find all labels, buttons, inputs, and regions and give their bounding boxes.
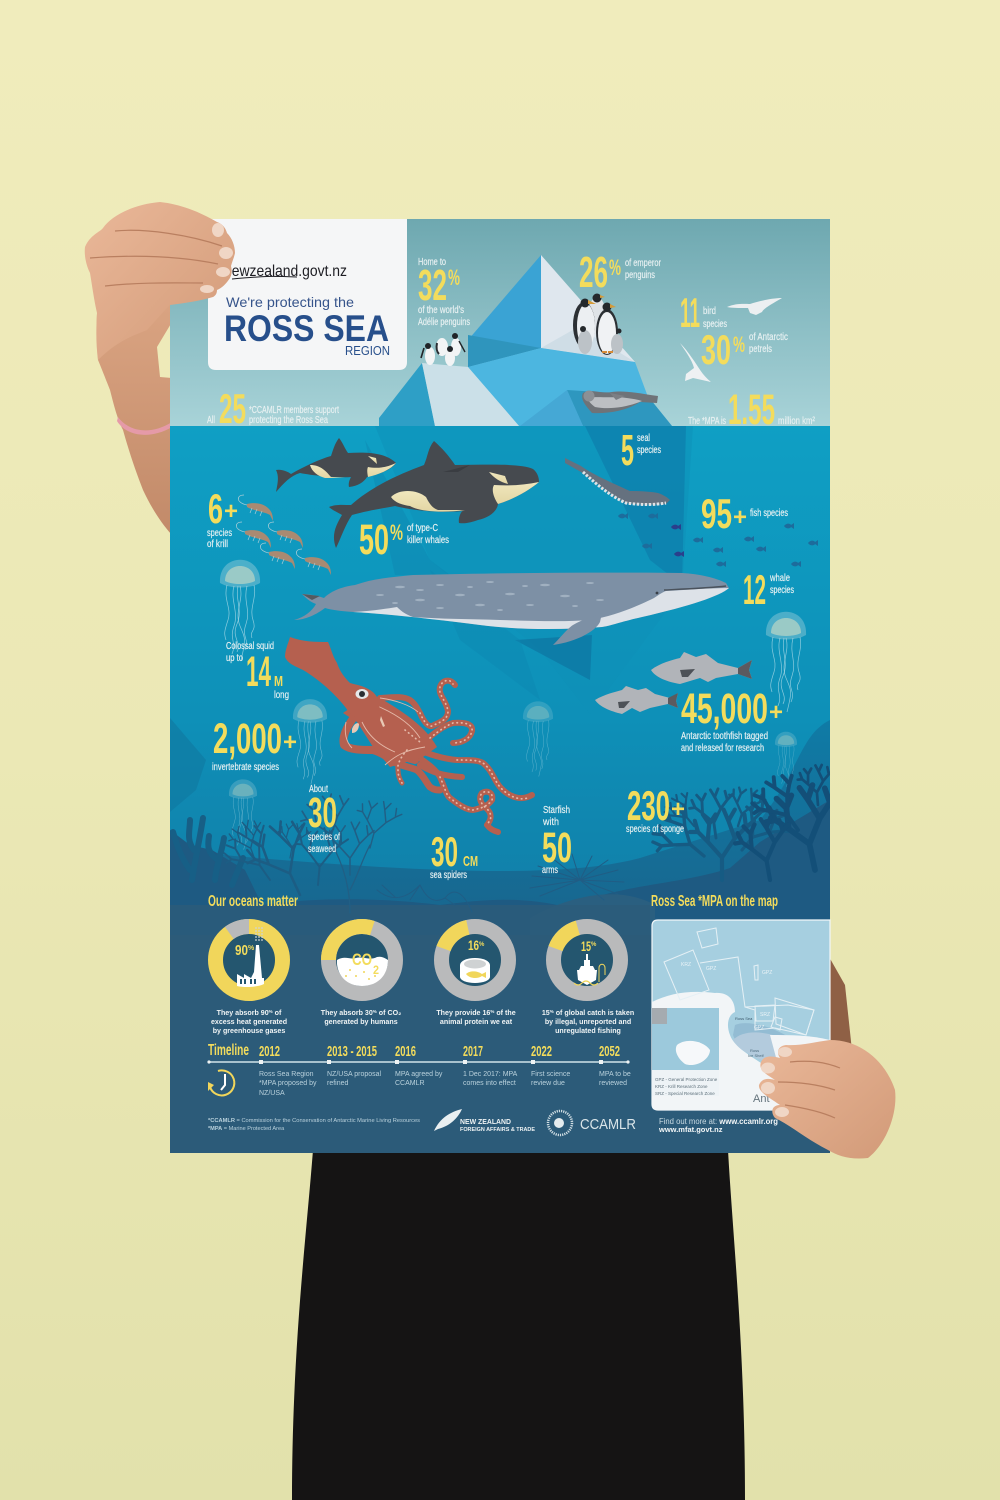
person: left arm bbox=[97, 290, 172, 535]
caption: donut 2: generated by humans bbox=[324, 1018, 398, 1026]
map panel: GPZ bbox=[762, 970, 772, 976]
find out more text: Find out more at: www.ccamlr.org bbox=[659, 1117, 778, 1126]
stat: 6+ species of krill: species bbox=[207, 528, 232, 539]
stat: 12 whale species: 12 bbox=[743, 566, 766, 613]
find out more text: www.mfat.govt.nz bbox=[658, 1125, 723, 1134]
footnotes bbox=[208, 1118, 420, 1132]
stat: 2,000+ invertebrate: 2,000 bbox=[213, 715, 282, 763]
colossal squid bbox=[285, 637, 532, 832]
logo: New Zealand fern: FOREIGN AFFAIRS & TRADE bbox=[460, 1127, 535, 1133]
stat: 30 cm sea spiders: CM bbox=[463, 853, 478, 870]
stat: 11 bird species: bird bbox=[703, 306, 716, 317]
donut: illegal fishing 15%: 15 bbox=[581, 938, 591, 954]
map panel: GPZ - General Protection Zone bbox=[655, 1077, 718, 1082]
heading: map: Ross Sea *MPA on the map bbox=[651, 893, 778, 910]
sky panel bbox=[170, 219, 830, 426]
map panel: Ross Sea bbox=[735, 1016, 753, 1021]
donut: CO2 30%: CO bbox=[352, 950, 372, 969]
stat: Antarctic petrels 30%: petrels bbox=[749, 344, 772, 355]
stat: emperor penguins 26%: 26 bbox=[579, 248, 608, 297]
logo: CCAMLR: CCAMLR bbox=[580, 1116, 636, 1133]
stat: Adelie penguins 32% bbox=[418, 257, 470, 328]
caption: donut 3: They provide 16 bbox=[436, 1009, 490, 1017]
caption: donut 2: of CO₂ bbox=[377, 1009, 401, 1017]
title card: ROSS SEA bbox=[224, 308, 389, 349]
icon: krill group bbox=[236, 495, 331, 575]
hand: top left bbox=[85, 202, 235, 360]
stat: 12 whale species: whale bbox=[769, 573, 790, 584]
map panel: GPZ bbox=[754, 1025, 764, 1031]
coral and seaweed silhouettes bbox=[173, 764, 852, 913]
icon: emperor penguins bbox=[573, 294, 623, 355]
stat: Adelie penguins 32%: of the world's bbox=[418, 305, 464, 316]
stat: starfish 50 arms: 50 bbox=[542, 824, 572, 872]
stat: 5 seal species bbox=[621, 426, 661, 475]
timeline entry 2016 bbox=[395, 1043, 443, 1087]
stat: 45,000+ toothfish: 45,000 bbox=[681, 685, 768, 733]
stat: MPA 1.55 million km2 bbox=[688, 386, 816, 434]
timeline entry 2017: 2017 bbox=[463, 1043, 483, 1060]
stat: 25 CCAMLR members: *CCAMLR members support bbox=[249, 405, 339, 416]
person: right arm bbox=[828, 955, 853, 1060]
donut: protein 16%: 16 bbox=[468, 937, 479, 953]
stat: 230+ sponge: + bbox=[671, 796, 685, 823]
stat: Adelie penguins 32%: % bbox=[448, 265, 460, 290]
stat: 2,000+ invertebrate bbox=[212, 715, 297, 773]
stat: starfish 50 arms: with bbox=[542, 817, 559, 828]
stat: Adelie penguins 32%: Adélie penguins bbox=[418, 317, 470, 328]
logo: CCAMLR bbox=[548, 1111, 636, 1135]
map panel: SRZ bbox=[760, 1012, 770, 1018]
stat: 45,000+ toothfish: Antarctic toothfish tagged bbox=[681, 731, 768, 742]
stat: type-C killer whales 50% bbox=[359, 516, 449, 564]
timeline entry 2022: 2022 bbox=[531, 1043, 552, 1060]
caption: donut 1: of bbox=[273, 1009, 282, 1017]
timeline entry 2012: 2012 bbox=[259, 1043, 280, 1060]
stat: 95+ fish species bbox=[701, 490, 788, 537]
stat: 25 CCAMLR members: All bbox=[207, 415, 215, 426]
donut: illegal fishing 15% bbox=[544, 917, 630, 1003]
stat: squid 14 M long: Colossal squid bbox=[226, 641, 274, 652]
map panel: Ant bbox=[753, 1093, 770, 1105]
stat: 6+ species of krill: 6 bbox=[208, 485, 223, 532]
seabed hills bbox=[170, 718, 830, 1000]
stat: 30 cm sea spiders: 30 bbox=[431, 828, 458, 875]
map panel: KRZ - Krill Research Zone bbox=[655, 1084, 708, 1089]
caption: donut 1: excess heat generated bbox=[211, 1018, 287, 1026]
stat: 30 species of seaweed: seaweed bbox=[308, 844, 336, 855]
footnotes: *MPA = Marine Protected Area bbox=[208, 1126, 285, 1132]
stat: type-C killer whales 50%: of type-C bbox=[407, 523, 438, 534]
caption: donut 4: unregulated fishing bbox=[555, 1027, 621, 1035]
stat: MPA 1.55 million km2: 1.55 bbox=[728, 386, 775, 434]
stat: 25 CCAMLR members: 25 bbox=[219, 385, 246, 432]
stat: starfish 50 arms: arms bbox=[542, 865, 558, 876]
timeline entry 2012: Ross Sea Region bbox=[259, 1071, 314, 1078]
title card bbox=[208, 219, 407, 370]
submerged iceberg bbox=[365, 426, 693, 714]
stat: Antarctic petrels 30%: 30 bbox=[701, 326, 731, 373]
stat: 230+ sponge: 230 bbox=[627, 782, 670, 829]
icon: seal on ice bbox=[582, 390, 658, 413]
poster bbox=[170, 219, 852, 1153]
heading: our oceans matter: Our oceans matter bbox=[208, 893, 298, 910]
stat: Adelie penguins 32%: Home to bbox=[418, 257, 446, 268]
donut: heat 90%: 90 bbox=[235, 942, 248, 959]
stat: squid 14 M long: up to bbox=[226, 653, 243, 664]
bottom band bbox=[170, 935, 830, 1153]
timeline entry 2013-2015 bbox=[327, 1043, 382, 1087]
small killer whale bbox=[276, 438, 396, 492]
stat: type-C killer whales 50%: killer whales bbox=[407, 535, 449, 546]
map panel: GPZ bbox=[706, 966, 716, 972]
stat: emperor penguins 26%: % bbox=[609, 255, 621, 280]
stat: 95+ fish species: 95 bbox=[701, 490, 732, 537]
timeline entry 2017: comes into effect bbox=[463, 1080, 516, 1087]
stat: 45,000+ toothfish: + bbox=[769, 699, 783, 726]
timeline entry 2016: CCAMLR bbox=[395, 1080, 425, 1087]
caption: donut 4: by illegal, unreported and bbox=[545, 1018, 631, 1026]
stat: type-C killer whales 50%: % bbox=[390, 520, 403, 545]
timeline: Timeline bbox=[208, 1042, 249, 1059]
stat: 25 CCAMLR members: protecting the Ross Sea bbox=[249, 415, 328, 426]
stat: Antarctic petrels 30%: % bbox=[733, 332, 745, 357]
stat: 5 seal species: seal bbox=[637, 433, 650, 444]
timeline bbox=[207, 1042, 631, 1097]
caption: donut 3: of the bbox=[494, 1009, 516, 1017]
stat: emperor penguins 26% bbox=[579, 248, 661, 297]
logo: New Zealand fern: NEW ZEALAND bbox=[460, 1117, 511, 1126]
stat: MPA 1.55 million km2: million km² bbox=[778, 416, 816, 427]
timeline entry 2013-2015: 2013 - 2015 bbox=[327, 1043, 377, 1060]
timeline entry 2052: MPA to be bbox=[599, 1071, 631, 1078]
caption: donut 4: of global catch is taken bbox=[554, 1009, 634, 1017]
caption: donut 1: by greenhouse gases bbox=[213, 1027, 285, 1035]
stat: squid 14 M long: 14 bbox=[246, 648, 271, 696]
timeline entry 2022 bbox=[531, 1043, 570, 1087]
timeline entry 2017 bbox=[463, 1043, 518, 1087]
stat: 5 seal species: 5 bbox=[621, 426, 634, 475]
stat: 30 cm sea spiders: sea spiders bbox=[430, 870, 467, 881]
title card: We're protecting the bbox=[226, 294, 354, 310]
caption: donut 3: animal protein we eat bbox=[440, 1018, 513, 1026]
blue whale bbox=[294, 573, 729, 645]
sea panel bbox=[170, 426, 830, 1153]
stat: 95+ fish species: + bbox=[733, 504, 747, 531]
hand: bottom right bbox=[759, 1040, 895, 1159]
timeline entry 2016: MPA agreed by bbox=[395, 1071, 443, 1078]
timeline entry 2012 bbox=[259, 1043, 317, 1097]
timeline entry 2013-2015: refined bbox=[327, 1080, 349, 1087]
donut: CO2 30% bbox=[328, 926, 396, 994]
stat: 95+ fish species: fish species bbox=[750, 508, 788, 519]
stat: Adelie penguins 32%: 32 bbox=[418, 261, 447, 310]
caption: donut 2: % bbox=[373, 1009, 377, 1014]
map panel: Ice Shelf bbox=[748, 1053, 764, 1058]
map panel bbox=[652, 920, 830, 1110]
stat: 2,000+ invertebrate: + bbox=[283, 729, 297, 756]
stat: 6+ species of krill bbox=[207, 485, 238, 550]
stat: 6+ species of krill: of krill bbox=[207, 539, 228, 550]
timeline entry 2017: 1 Dec 2017: MPA bbox=[463, 1071, 518, 1078]
donut: illegal fishing 15%: % bbox=[591, 942, 597, 948]
stat: 230+ sponge: species of sponge bbox=[626, 824, 684, 835]
donut: protein 16%: % bbox=[479, 942, 485, 948]
icon: clock bbox=[208, 1070, 234, 1095]
map panel: SRZ - Special Research Zone bbox=[655, 1091, 715, 1096]
logo: New Zealand fern bbox=[434, 1109, 535, 1133]
large killer whale bbox=[329, 441, 539, 548]
stat: 6+ species of krill: + bbox=[224, 498, 238, 525]
stat: 2,000+ invertebrate: invertebrate species bbox=[212, 762, 279, 773]
iceberg above water bbox=[379, 255, 672, 426]
stat: 45,000+ toothfish: and released for research bbox=[681, 743, 764, 754]
swimming leopard seal bbox=[565, 458, 670, 505]
stat: squid 14 M long bbox=[226, 641, 289, 701]
icon: Adelie penguins bbox=[421, 333, 465, 366]
toothfish pair bbox=[595, 652, 752, 714]
caption: donut 1: % bbox=[269, 1009, 273, 1014]
stat: emperor penguins 26%: of emperor bbox=[625, 258, 661, 269]
person: bracelet bbox=[117, 417, 172, 435]
stat: 11 bird species: species bbox=[703, 319, 727, 330]
person: black clothing bbox=[292, 1150, 745, 1500]
map panel: KRZ bbox=[681, 962, 691, 968]
stat: 30 species of seaweed bbox=[308, 784, 340, 855]
timeline entry 2052: 2052 bbox=[599, 1043, 620, 1060]
stat: 12 whale species: species bbox=[770, 585, 794, 596]
caption: donut 1: They absorb 90 bbox=[217, 1009, 269, 1017]
donut: heat 90% bbox=[202, 913, 296, 1007]
jellyfish group bbox=[220, 560, 806, 850]
stat: squid 14 M long: long bbox=[274, 690, 289, 701]
find out more text bbox=[658, 1117, 778, 1134]
caption: donut 2: They absorb 30 bbox=[321, 1009, 373, 1017]
timeline entry 2052: reviewed bbox=[599, 1080, 627, 1087]
timeline entry 2052 bbox=[599, 1043, 631, 1087]
stat: Antarctic petrels 30% bbox=[701, 326, 788, 373]
timeline entry 2016: 2016 bbox=[395, 1043, 416, 1060]
caption: donut 4: 15 bbox=[542, 1009, 550, 1017]
donut: protein 16% bbox=[432, 917, 518, 1003]
stat: 45,000+ toothfish bbox=[681, 685, 783, 754]
stat: 25 CCAMLR members bbox=[207, 385, 339, 432]
stat: type-C killer whales 50%: 50 bbox=[359, 516, 389, 564]
donut: CO2 30%: 2 bbox=[373, 963, 379, 977]
stat: MPA 1.55 million km2: The *MPA is bbox=[688, 416, 726, 427]
stat: 11 bird species: 11 bbox=[680, 289, 700, 336]
caption: donut 3: % bbox=[490, 1009, 494, 1014]
stat: starfish 50 arms bbox=[542, 805, 572, 876]
timeline entry 2012: *MPA proposed by bbox=[259, 1080, 317, 1087]
caption: donut 4: % bbox=[550, 1009, 554, 1014]
stat: 30 species of seaweed: species of bbox=[308, 832, 340, 843]
timeline entry 2022: First science bbox=[531, 1071, 570, 1078]
stat: starfish 50 arms: Starfish bbox=[543, 805, 570, 816]
stat: squid 14 M long: M bbox=[274, 673, 283, 690]
donut: heat 90%: % bbox=[248, 945, 255, 952]
map panel: Ross bbox=[750, 1048, 759, 1053]
stat: 30 species of seaweed: 30 bbox=[308, 789, 337, 837]
stat: emperor penguins 26%: penguins bbox=[625, 270, 655, 281]
stat: Antarctic petrels 30%: of Antarctic bbox=[749, 332, 788, 343]
footnotes: *CCAMLR = Commission for the Conservation of Antarctic Marine Living Resources bbox=[208, 1118, 420, 1124]
stat: 5 seal species: species bbox=[637, 445, 661, 456]
title card: newzealand.govt.nz bbox=[224, 263, 347, 280]
small fish shoal bbox=[618, 513, 818, 567]
timeline entry 2012: NZ/USA bbox=[259, 1090, 285, 1097]
timeline entry 2022: review due bbox=[531, 1080, 565, 1087]
stat: 30 species of seaweed: About bbox=[309, 784, 328, 795]
icon: flying petrels bbox=[680, 298, 782, 382]
timeline entry 2013-2015: NZ/USA proposal bbox=[327, 1071, 382, 1078]
title card: REGION bbox=[345, 344, 390, 358]
